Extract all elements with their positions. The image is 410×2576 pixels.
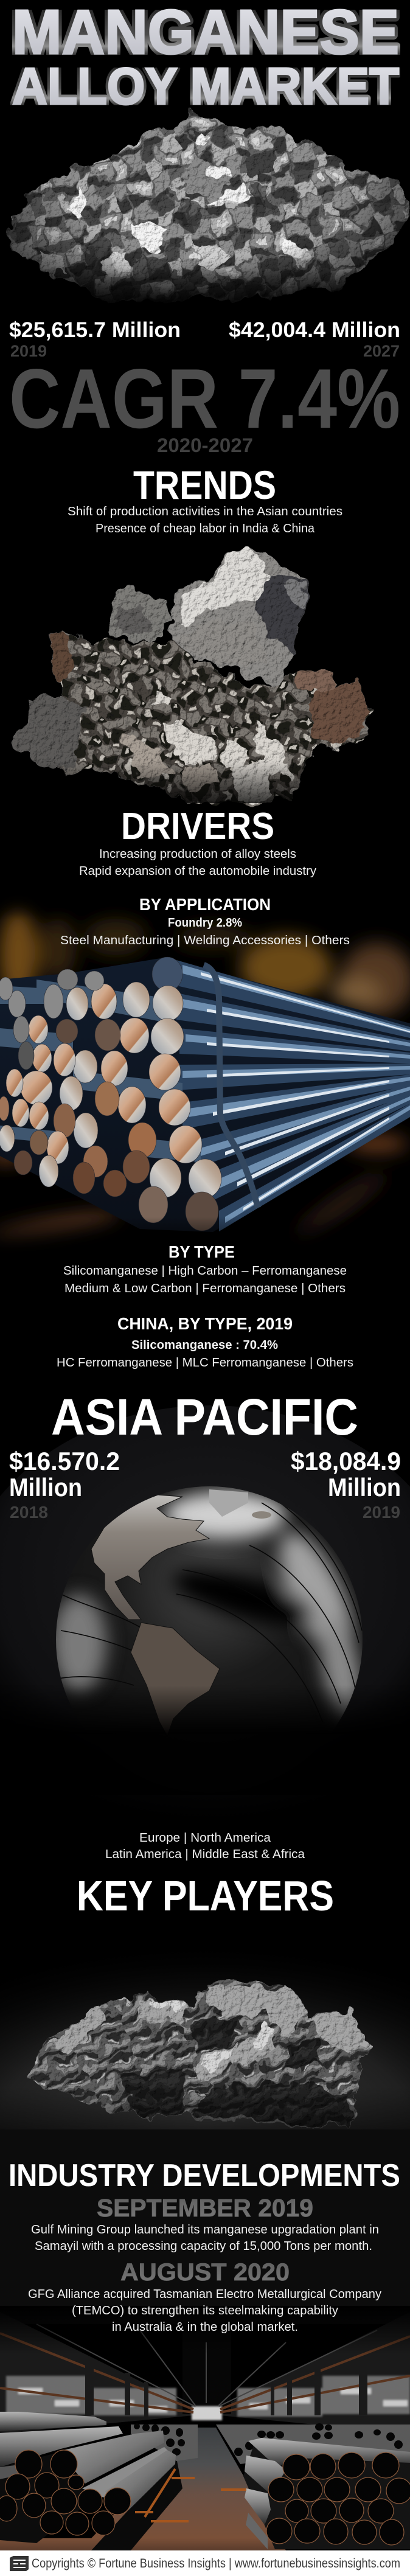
section: trends: Shift of production activities in the Asian countries: [68, 505, 342, 518]
development: August 2020: [28, 2259, 381, 2334]
steel strap: [204, 965, 258, 1208]
stat: Asia Pacific 2018: $16.570.2: [9, 1447, 120, 1475]
heading block: by type: Silicomanganese | High Carbon – Ferromanganese: [63, 1264, 347, 1278]
footer: [0, 2550, 410, 2576]
development: September 2019: Samayil with a processing capacity of 15,000 Tons per month.: [35, 2240, 372, 2253]
CAGR figure: 2020-2027: [157, 434, 253, 456]
title: [10, 9, 400, 106]
distant pipes: [131, 2423, 410, 2464]
stat: 2027 market size: $42,004.4 Million: [229, 318, 400, 342]
stat: Asia Pacific 2019: 2019: [363, 1503, 400, 1522]
image: pipe factory hall: [0, 2306, 410, 2550]
stat: 2019 market size: [9, 318, 181, 360]
stat: Asia Pacific 2019: [291, 1447, 401, 1522]
image: metallic globe: [0, 1405, 410, 1735]
text: other regions: Latin America | Middle East & Africa: [105, 1848, 305, 1861]
heading block: by application: BY APPLICATION: [139, 895, 271, 914]
title: ALLOY MARKET: [12, 58, 399, 116]
text: other regions: Europe | North America: [139, 1831, 271, 1845]
orange pipe rack: [135, 2469, 195, 2521]
section: trends: Presence of cheap labor in India & China: [96, 522, 315, 535]
heading block: by type: BY TYPE: [169, 1242, 235, 1261]
section: drivers: Increasing production of alloy steels: [99, 848, 296, 861]
stat: 2027 market size: 2027: [363, 342, 400, 360]
heading block: by type: [63, 1242, 347, 1295]
left pipe stacks: [0, 2412, 195, 2543]
section: trends: TRENDS: [133, 462, 276, 507]
stat: 2019 market size: $25,615.7 Million: [9, 318, 181, 342]
development: September 2019: [31, 2194, 379, 2253]
floor: [0, 2428, 286, 2550]
right pipe stacks: [221, 2438, 410, 2549]
development: August 2020: AUGUST 2020: [120, 2259, 290, 2286]
development: September 2019: Gulf Mining Group launched its manganese upgradation plant in: [31, 2223, 379, 2237]
heading block: China by type: CHINA, BY TYPE, 2019: [117, 1314, 293, 1333]
development: August 2020: (TEMCO) to strengthen its steelmaking capability: [72, 2304, 338, 2317]
heading block: China by type: Silicomanganese : 70.4%: [131, 1338, 278, 1352]
globe grooves: [61, 1502, 363, 1707]
development: August 2020: GFG Alliance acquired Tasmanian Electro Metallurgical Company: [28, 2288, 381, 2301]
stat: Asia Pacific 2019: $18,084.9: [291, 1447, 401, 1475]
heading block: China by type: [57, 1314, 353, 1370]
development: September 2019: SEPTEMBER 2019: [97, 2194, 313, 2222]
globe highlights: [52, 1492, 368, 1724]
image: pile of manganese alloy chunks: [0, 106, 410, 310]
text: other regions: [105, 1831, 305, 1861]
furnace glow background: [0, 910, 410, 1246]
section: drivers: Rapid expansion of the automobile industry: [79, 865, 316, 878]
image: grey alloy rock on dark floor: [0, 1929, 410, 2184]
development: August 2020: in Australia & in the global market.: [112, 2320, 298, 2334]
rod bodies: [0, 958, 410, 1232]
heading: key players: KEY PLAYERS: [77, 1872, 334, 1920]
continents: [209, 1489, 248, 1517]
background texture behind industry developments: [0, 2129, 410, 2324]
stat: Asia Pacific 2018: Million: [9, 1473, 82, 1502]
image: steel rod bundle with furnace background: [0, 882, 410, 1259]
icon: Fortune Business Insights logo: [10, 2556, 29, 2571]
section: drivers: [79, 806, 316, 878]
heading block: by application: Steel Manufacturing | Welding Accessories | Others: [60, 934, 350, 947]
stat: Asia Pacific 2018: [9, 1447, 120, 1522]
section: trends: [68, 462, 342, 535]
heading block: by application: Foundry 2.8%: [168, 916, 242, 930]
section: drivers: DRIVERS: [121, 806, 274, 848]
stat: 2019 market size: 2019: [10, 342, 47, 360]
rod end faces: [0, 957, 221, 1231]
heading block: by application: [60, 895, 350, 947]
heading block: China by type: HC Ferromanganese | MLC Ferromanganese | Others: [57, 1356, 353, 1370]
image: raw manganese rock: [0, 548, 410, 803]
stat: Asia Pacific 2018: 2018: [10, 1503, 48, 1522]
stat: 2027 market size: [229, 318, 400, 360]
stat: Asia Pacific 2019: Million: [328, 1473, 401, 1502]
factory walls and roof: [0, 2312, 410, 2434]
heading: Asia Pacific: ASIA PACIFIC: [51, 1388, 358, 1446]
heading block: by type: Medium & Low Carbon | Ferromanganese | Others: [64, 1282, 346, 1295]
